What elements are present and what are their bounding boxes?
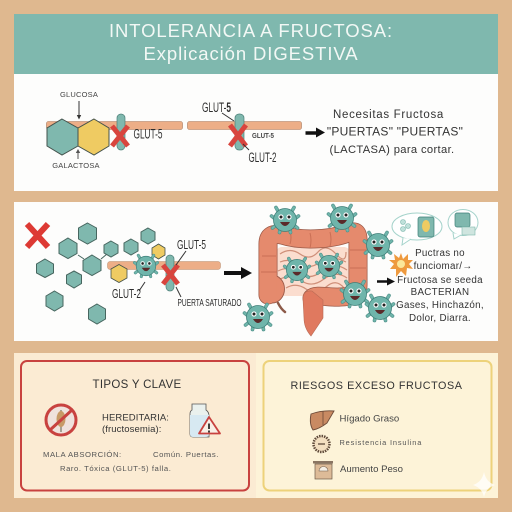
- text: mala absorcion: Común. Puertas.: [153, 450, 219, 459]
- thought bubbles: [392, 210, 478, 245]
- heading: RIESGOS EXCESO FRUCTOSA: [290, 380, 463, 392]
- panel: riesgos: [264, 361, 492, 490]
- text: mala absorcion: Raro. Tóxica (GLUT-5) falla.: [60, 464, 171, 473]
- text: resistencia insulina: Resistencia Insulina: [340, 438, 422, 447]
- colon: [268, 232, 358, 298]
- label: puerta saturado: [176, 287, 242, 309]
- panel: normal digestion: [14, 74, 498, 191]
- explanation text: Necesitas Fructosa: [333, 109, 444, 121]
- label: GLUT-5: [176, 237, 206, 265]
- molecule links: [78, 254, 107, 259]
- label: galactosa: [52, 149, 100, 170]
- text: higado graso: Hígado Graso: [340, 414, 399, 424]
- text: hereditaria: (fructosemia):: [102, 424, 161, 435]
- icon: insulin resistance: [314, 436, 330, 452]
- label: GLUT-2: [243, 144, 276, 165]
- haustra: [261, 230, 366, 272]
- explanation text: Puctras no: [415, 248, 465, 259]
- transporter blocked 2: [230, 114, 246, 150]
- text: hereditaria: HEREDITARIA:: [102, 412, 169, 424]
- bottom background: [14, 353, 498, 498]
- title: INTOLERANCIA A FRUCTOSA:: [109, 20, 393, 41]
- arrow: [224, 267, 252, 279]
- hexagon: galactosa: [47, 119, 78, 155]
- label: GLUT-5 top: [202, 100, 234, 121]
- heading: TIPOS Y CLAVE: [93, 379, 181, 391]
- title: Explicación DIGESTIVA: [144, 43, 358, 64]
- label: GLUT-5: GLUT-5: [134, 126, 162, 142]
- label: GLUT-2: [112, 282, 145, 301]
- label: puerta saturado: PUERTA SATURADO: [178, 297, 242, 309]
- arrow: [377, 278, 395, 286]
- transporter blocked: [112, 114, 128, 150]
- icon: milk bottle with warning: [190, 404, 220, 437]
- label: glucosa: GLUCOSA: [60, 90, 98, 99]
- arrow: [306, 128, 325, 138]
- icon: liver: [310, 411, 334, 430]
- label: GLUT-2: GLUT-2: [248, 150, 276, 165]
- text: mala absorcion: [43, 450, 219, 473]
- membrane bar left: [46, 122, 182, 130]
- membrane bar: [108, 262, 220, 270]
- panel: malabsorption: [14, 202, 498, 341]
- rectum: [303, 291, 323, 336]
- header banner: [14, 14, 498, 74]
- hexagon: glucosa: [78, 119, 109, 155]
- membrane bar right: [188, 122, 302, 130]
- explanation text: [396, 248, 484, 324]
- label: GLUT-5 top: GLUT-5: [202, 100, 231, 115]
- colon fill: [268, 232, 358, 298]
- explanation text: BACTERIAN: [411, 287, 469, 298]
- text: mala absorcion: MALA ABSORCIÓN:: [43, 450, 122, 459]
- explanation text: Dolor, Diarra.: [409, 313, 471, 324]
- explanation text: (LACTASA) para cortar.: [330, 144, 454, 156]
- icon: scale: [313, 461, 333, 479]
- bacterium at membrane: [135, 255, 157, 277]
- sparkle: [473, 472, 495, 497]
- label: GLUT-5: GLUT-5: [177, 237, 206, 252]
- transporter saturated: [163, 255, 178, 291]
- appendix: [278, 303, 285, 312]
- text: aumento peso: Aumento Peso: [340, 464, 403, 475]
- text: hereditaria: [102, 412, 169, 435]
- label: GLUT-5 small: GLUT-5: [252, 133, 274, 140]
- icon: burst: [389, 253, 413, 277]
- title: [109, 20, 393, 64]
- icon: red x: [27, 224, 48, 247]
- fructose molecules: [36, 223, 155, 324]
- label: GLUT-2: GLUT-2: [112, 286, 141, 301]
- bacteria on intestine: [244, 206, 394, 330]
- illustration: intestine: [260, 230, 366, 336]
- label: glucosa: [60, 90, 98, 120]
- explanation text: [327, 109, 463, 156]
- explanation text: "PUERTAS" "PUERTAS": [327, 124, 463, 138]
- label: galactosa: GALACTOSA: [52, 161, 100, 170]
- panel: tipos y clave: [21, 361, 249, 490]
- icon: no wheat: [46, 405, 76, 435]
- explanation text: Fructosa se seeda: [397, 275, 483, 286]
- explanation text: funciomar/→: [414, 261, 472, 272]
- yellow molecules: [111, 244, 165, 282]
- small intestine: [276, 247, 350, 296]
- explanation text: Gases, Hinchazón,: [396, 300, 484, 311]
- cecum: [260, 275, 284, 303]
